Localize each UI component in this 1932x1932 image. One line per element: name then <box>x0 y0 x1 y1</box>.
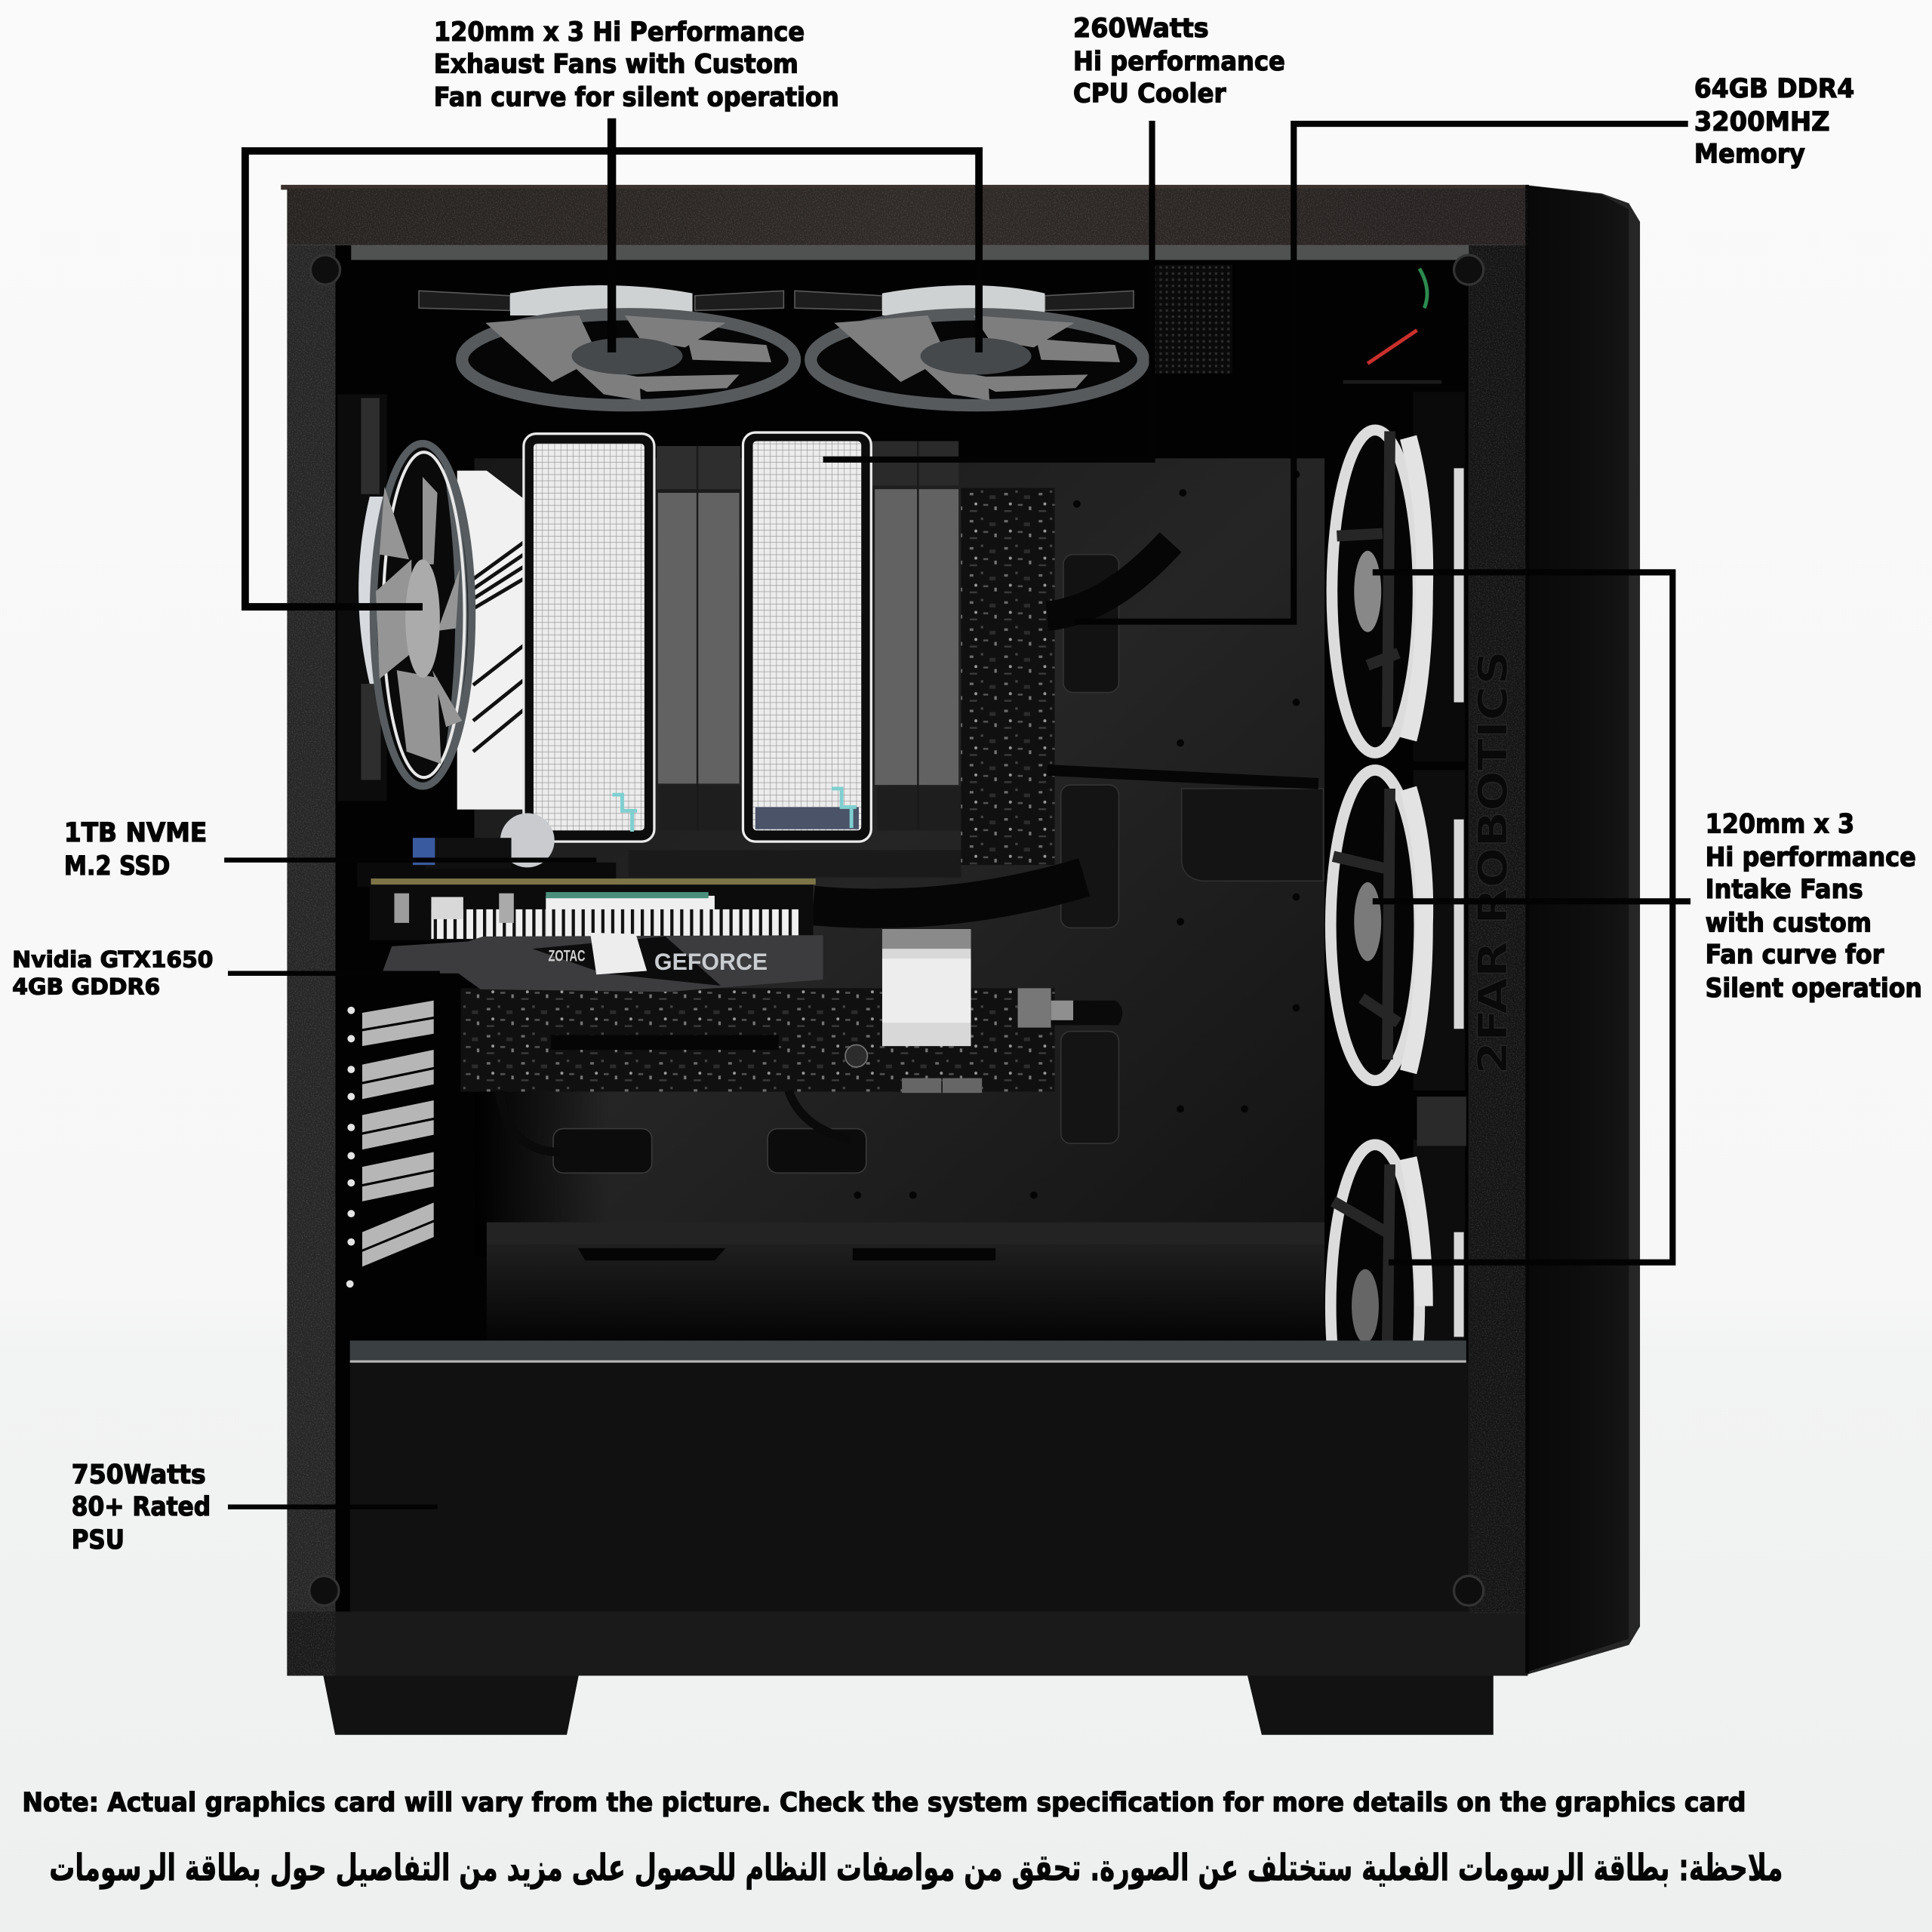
graphics card <box>357 863 823 992</box>
label: memory: 64GB DDR4 <box>1694 74 1854 104</box>
top right wires <box>1343 269 1441 382</box>
label: exhaust fans: Exhaust Fans with Custom <box>434 49 798 79</box>
label: intake fans: Fan curve for <box>1706 940 1884 971</box>
label: psu: PSU <box>72 1525 125 1555</box>
pc case <box>281 185 1640 1735</box>
label: psu <box>72 1460 211 1555</box>
intake fan housings <box>1414 392 1466 1343</box>
psu shroud <box>350 1340 1469 1612</box>
geforce text: GEFORCE <box>654 949 768 975</box>
case front frame <box>281 185 1529 1675</box>
label: gpu: 4GB GDDR6 <box>12 974 160 1000</box>
label: intake fans: Intake Fans <box>1706 875 1863 905</box>
label: ssd <box>64 818 207 881</box>
right intake fans <box>1325 424 1466 1340</box>
case feet <box>323 1673 1494 1735</box>
label: cpu cooler: CPU Cooler <box>1073 79 1226 109</box>
chipset heatsink <box>882 929 971 1046</box>
cooler fin stack 1 <box>657 446 743 830</box>
pci slot vents <box>346 1001 434 1287</box>
leader line: exhaust fans <box>245 118 979 607</box>
brand text: 2FAR ROBOTICS <box>1469 651 1517 1075</box>
label: intake fans <box>1706 810 1922 1004</box>
intake fan 1 <box>1332 430 1425 753</box>
cpu cooler <box>524 432 961 841</box>
label: memory <box>1694 74 1854 170</box>
leader line: gpu <box>228 972 440 975</box>
label: ssd: 1TB NVME <box>64 818 207 848</box>
label: ssd: M.2 SSD <box>64 851 170 881</box>
upper motherboard <box>961 488 1055 865</box>
label: exhaust fans <box>434 17 839 112</box>
intake fan 3 <box>1325 1139 1433 1340</box>
label: intake fans: 120mm x 3 <box>1706 810 1854 840</box>
english note: Note: Actual graphics card will vary from the picture. Check the system specification for more details on the graphics card <box>22 1788 1746 1818</box>
zotac text: ZOTAC <box>549 947 586 964</box>
cooler mesh panel 2 <box>743 432 871 841</box>
top exhaust fans <box>419 265 1232 405</box>
cooler fin stack 2 <box>872 441 961 830</box>
screws <box>309 255 1484 1605</box>
label: cpu cooler: 260Watts <box>1073 14 1209 44</box>
interior <box>335 260 1469 1612</box>
label: gpu <box>12 947 213 1000</box>
top fan 1 <box>419 285 795 405</box>
intake fan 2 <box>1331 770 1425 1081</box>
label: memory: 3200MHZ <box>1694 107 1829 137</box>
cooler mesh panel 1 <box>524 434 654 841</box>
leader line: cpu cooler <box>823 121 1152 460</box>
motherboard tray <box>475 458 1324 1257</box>
left exhaust fan <box>337 394 530 810</box>
label: exhaust fans: Fan curve for silent operation <box>434 82 839 112</box>
label: psu: 750Watts <box>72 1460 206 1491</box>
label: memory: Memory <box>1694 140 1805 170</box>
case frame grain <box>287 189 1527 1675</box>
ram and vrm detail <box>413 814 961 877</box>
leader line: intake fans <box>1373 572 1690 1263</box>
top vent <box>1152 265 1232 374</box>
lower motherboard <box>461 988 1122 1152</box>
top fan 2 <box>795 285 1143 405</box>
leader line: ssd <box>224 859 596 862</box>
leader line: psu <box>228 1506 438 1509</box>
tray bottom ledge <box>487 1223 1324 1343</box>
case side panel <box>1523 185 1640 1675</box>
label: gpu: Nvidia GTX1650 <box>12 947 213 973</box>
label: cpu cooler: Hi performance <box>1073 47 1285 77</box>
cables <box>814 542 1318 909</box>
label: cpu cooler <box>1073 14 1285 109</box>
label: intake fans: Hi performance <box>1706 843 1916 873</box>
label: exhaust fans: 120mm x 3 Hi Performance <box>434 17 804 48</box>
label: intake fans: with custom <box>1706 908 1872 938</box>
label: psu: 80+ Rated <box>72 1492 211 1522</box>
leader line: memory <box>1075 124 1688 622</box>
